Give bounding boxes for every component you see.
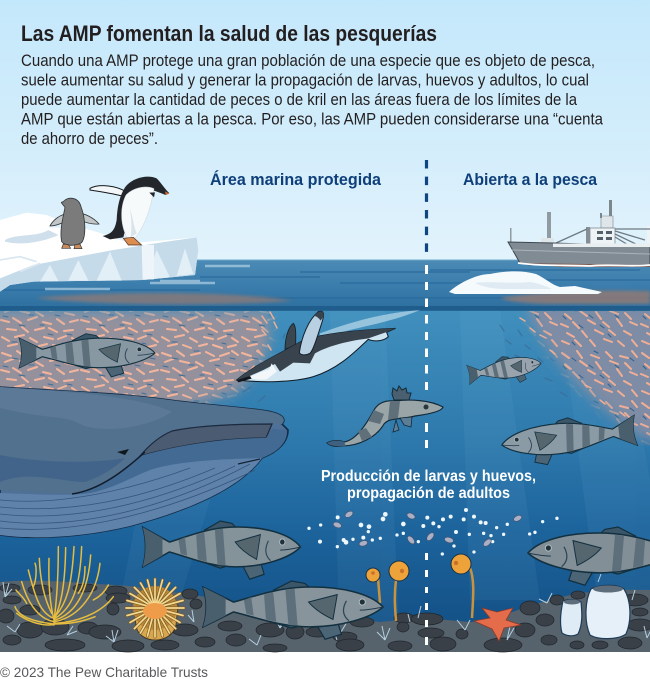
fish: lower centre xyxy=(143,521,300,579)
penguin: swimming xyxy=(237,310,420,382)
label: larval production xyxy=(321,468,536,502)
krill swarm right xyxy=(520,311,650,446)
intro text block xyxy=(21,52,604,148)
iceberg xyxy=(0,213,198,292)
fish: upper left xyxy=(19,334,155,377)
label: protected area: Área marina protegida xyxy=(210,170,382,189)
fish: lower right xyxy=(528,527,650,585)
eggs and larvae xyxy=(307,508,559,556)
boundary line: above water xyxy=(425,160,428,252)
light rays xyxy=(120,311,650,652)
sea surface xyxy=(0,259,650,311)
fish: silver small xyxy=(466,351,544,390)
seabed xyxy=(0,574,650,652)
intro text block: AMP que están abiertas a la pesca. Por eso, las AMP pueden considerarse una “cuenta xyxy=(21,110,604,128)
krill scatter xyxy=(243,325,567,402)
intro text block: de ahorro de peces”. xyxy=(21,130,158,148)
fish: right middle xyxy=(500,411,638,469)
fishing boat xyxy=(508,200,650,267)
ice floe xyxy=(449,271,602,294)
krill swarm left xyxy=(0,311,278,405)
sky background xyxy=(0,0,650,260)
whale xyxy=(0,387,288,537)
krill scatter pink xyxy=(240,312,625,416)
penguin: Adelie xyxy=(90,177,170,245)
underwater background xyxy=(0,311,650,652)
sponge: large xyxy=(586,585,630,639)
intro text block: Cuando una AMP protege una gran población de una especie que es objeto de pesca, xyxy=(21,52,595,70)
intro text block: puede aumentar la cantidad de peces o de kril en las áreas fuera de los límites de la xyxy=(21,91,578,109)
label: larval production: propagación de adultos xyxy=(347,485,510,502)
intro text block: suele aumentar su salud y generar la propagación de larvas, huevos y adultos, lo cual xyxy=(21,72,589,90)
icefish xyxy=(327,386,443,446)
title: Las AMP fomentan la salud de las pesquerías xyxy=(21,21,437,46)
sponge: small xyxy=(560,599,582,636)
label: larval production: Producción de larvas y huevos, xyxy=(321,468,536,485)
coral: yellow fan xyxy=(15,547,113,625)
anemone xyxy=(126,579,184,640)
label: open to fishing: Abierta a la pesca xyxy=(463,170,598,189)
boundary line: below water xyxy=(425,265,428,645)
fish: bottom xyxy=(203,581,383,639)
starfish xyxy=(474,608,521,641)
penguin: small grey xyxy=(50,198,99,249)
sponge stalks: orange xyxy=(366,554,473,621)
